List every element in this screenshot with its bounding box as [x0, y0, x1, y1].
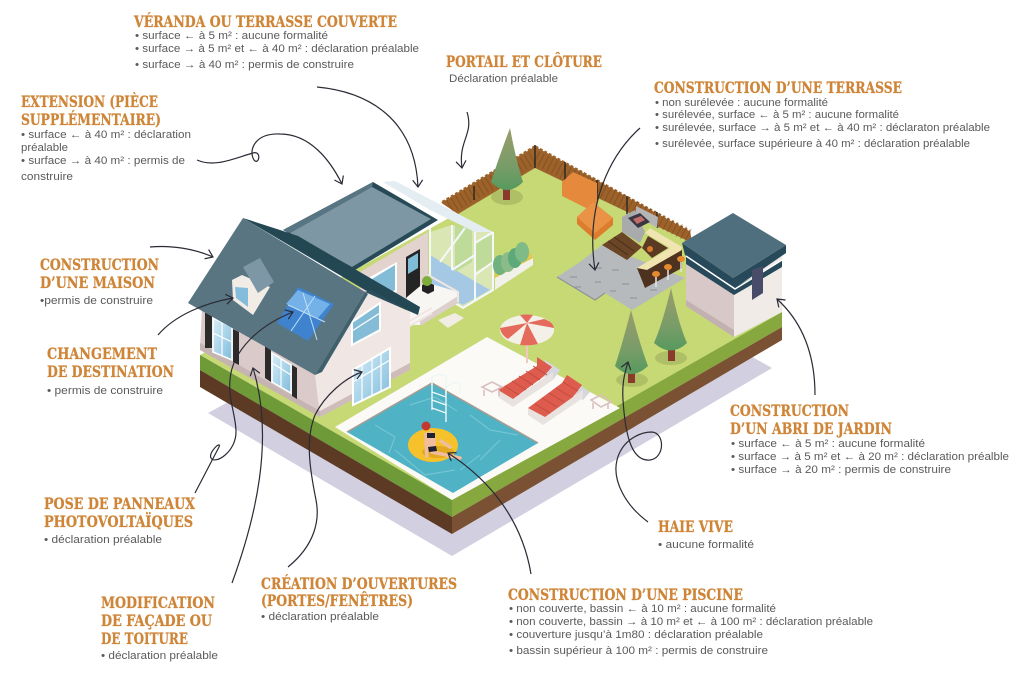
text block: véranda: • surface → à 40 m² : permis de construire	[135, 59, 354, 71]
text block: maison: CONSTRUCTION	[40, 255, 159, 274]
arrow: ouvertures	[288, 372, 362, 567]
text block: façade ou toiture: DE FAÇADE OU	[101, 611, 212, 630]
text block: extension	[21, 92, 191, 183]
text block: façade ou toiture	[101, 593, 218, 662]
text block: extension: • surface ← à 40 m² : déclaration	[21, 129, 191, 141]
text block: terrasse: • surélevée, surface supérieure à 40 m² : déclaration préalable	[655, 138, 970, 150]
arrow: abri	[777, 299, 815, 395]
roof dormer	[232, 258, 274, 315]
text block: véranda	[133, 12, 419, 71]
planter with shrubs	[493, 242, 533, 290]
text block: abri de jardin	[730, 401, 1009, 476]
text block: abri de jardin: CONSTRUCTION	[730, 401, 849, 420]
text block: panneaux photovoltaïques	[44, 494, 196, 546]
text block: panneaux photovoltaïques: • déclaration préalable	[44, 534, 162, 546]
conservatory	[383, 181, 493, 308]
text block: piscine: CONSTRUCTION D’UNE PISCINE	[508, 585, 743, 604]
front trees	[615, 288, 687, 387]
text block: terrasse: • surélevée, surface ← à 5 m² : aucune formalité	[655, 109, 899, 121]
side tables	[482, 382, 611, 409]
arrow: panneaux	[195, 312, 293, 493]
text block: extension: • surface → à 40 m² : permis de	[21, 155, 185, 167]
text block: extension: EXTENSION (PIÈCE	[21, 92, 158, 111]
text block: piscine	[508, 585, 873, 657]
arrow: terrasse	[593, 128, 640, 270]
text block: ouvertures: CRÉATION D’OUVERTURES	[261, 574, 457, 593]
text block: extension: SUPPLÉMENTAIRE)	[21, 110, 161, 129]
text block: façade ou toiture: DE TOITURE	[101, 629, 188, 648]
text block: terrasse	[654, 78, 990, 150]
windows, right wall	[352, 303, 390, 405]
garden shed	[682, 213, 786, 337]
text block: portail: PORTAIL ET CLÔTURE	[446, 52, 602, 71]
text block: extension: construire	[21, 171, 73, 183]
bar stools	[652, 256, 685, 287]
ground shadow	[208, 350, 772, 556]
text block: haie vive: • aucune formalité	[658, 539, 754, 551]
text block: terrasse: • surélevée, surface → à 5 m² et ← à 40 m² : déclaraton préalable	[655, 122, 990, 134]
text block: piscine: • non couverte, bassin → à 10 m² et ← à 100 m² : déclaration préalable	[509, 616, 873, 628]
text block: piscine: • couverture jusqu’à 1m80 : déclaration préalable	[509, 629, 763, 641]
entry deck with steps	[407, 275, 464, 328]
text block: ouvertures: (PORTES/FENÊTRES)	[261, 591, 413, 610]
arrow: façade	[232, 368, 263, 583]
text block: piscine: • bassin supérieur à 100 m² : permis de construire	[509, 645, 768, 657]
annotation arrows	[150, 87, 815, 583]
text block: ouvertures	[261, 574, 457, 623]
text block: véranda: • surface ← à 5 m² : aucune formalité	[135, 30, 328, 42]
text block: abri de jardin: • surface → à 20 m² : permis de construire	[731, 464, 951, 476]
pool deck	[335, 337, 620, 500]
text block: changement de destination: CHANGEMENT	[47, 344, 157, 363]
text block: panneaux photovoltaïques: PHOTOVOLTAÏQUES	[44, 512, 193, 531]
text block: haie vive	[658, 517, 754, 551]
arrow: changement de destination	[158, 298, 233, 335]
arrow: haie	[616, 362, 662, 522]
text block: maison: D’UNE MAISON	[40, 273, 155, 292]
outdoor kitchen	[602, 206, 682, 288]
stone patio	[557, 245, 685, 310]
main gable roof	[188, 218, 420, 375]
text block: changement de destination	[47, 344, 174, 397]
text block: maison: •permis de construire	[40, 295, 153, 307]
text block: abri de jardin: • surface → à 5 m² et ← à 20 m² : déclaration préalble	[731, 451, 1009, 463]
pool ladder	[432, 375, 460, 422]
arrow: extension	[197, 134, 342, 184]
isometric garden illustration	[188, 128, 786, 556]
text block: abri de jardin: • surface ← à 5 m² : aucune formalité	[731, 438, 925, 450]
text block: terrasse: CONSTRUCTION D’UNE TERRASSE	[654, 78, 902, 97]
text block: façade ou toiture: • déclaration préalable	[101, 650, 218, 662]
arrow: portail	[461, 112, 469, 168]
lounge chairs	[498, 357, 590, 425]
text block: portail: Déclaration préalable	[449, 73, 558, 85]
solar panel	[277, 287, 334, 341]
extension wall	[360, 232, 428, 330]
back tree	[491, 128, 523, 205]
text block: façade ou toiture: MODIFICATION	[101, 593, 215, 612]
orange garden sofa	[562, 172, 613, 240]
windows and shutters, left wall	[205, 313, 297, 399]
text block: véranda: VÉRANDA OU TERRASSE COUVERTE	[133, 12, 397, 31]
extension flat roof	[283, 182, 438, 270]
wooden fence	[440, 145, 692, 243]
text block: extension: préalable	[21, 142, 68, 154]
text block: abri de jardin: D’UN ABRI DE JARDIN	[730, 419, 892, 438]
text block: changement de destination: DE DESTINATION	[47, 362, 174, 381]
text block: véranda: • surface → à 5 m² et ← à 40 m² : déclaration préalable	[135, 43, 419, 55]
swimming pool	[347, 383, 538, 493]
arrow: maison	[150, 246, 213, 257]
inflatable ring with swimmer	[408, 422, 460, 462]
text block: maison	[40, 255, 159, 307]
arrow: piscine	[448, 453, 531, 574]
text block: haie vive: HAIE VIVE	[658, 517, 733, 536]
text block: ouvertures: • déclaration préalable	[261, 611, 379, 623]
text block: changement de destination: • permis de construire	[47, 385, 163, 397]
text block: portail	[446, 52, 602, 85]
main house walls	[200, 292, 410, 417]
arrow: véranda	[317, 87, 418, 187]
parasol	[500, 314, 554, 363]
ground block	[200, 168, 782, 534]
text block: piscine: • non couverte, bassin ← à 10 m² : aucune formalité	[509, 603, 776, 615]
text block: terrasse: • non surélevée : aucune formalité	[655, 97, 828, 109]
text block: panneaux photovoltaïques: POSE DE PANNEAUX	[44, 494, 196, 513]
